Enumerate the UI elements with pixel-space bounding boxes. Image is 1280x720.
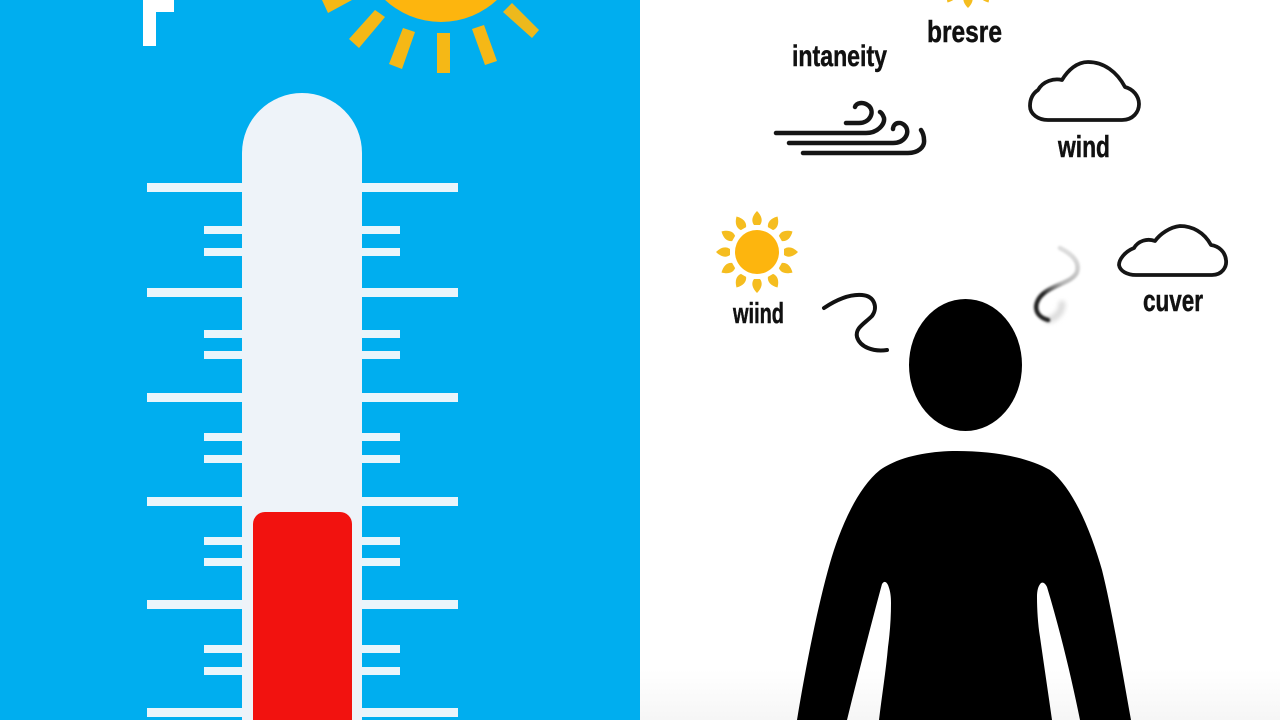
unit letter F <box>143 0 174 46</box>
icon: large sun <box>322 0 539 73</box>
label: wind (left): wiind <box>732 298 784 330</box>
thermometer tube <box>242 93 362 720</box>
label: intensity: intaneity <box>792 40 887 73</box>
label: breeze: bresre <box>927 14 1002 49</box>
icon: partial sun at top <box>927 0 1009 8</box>
person body <box>797 451 1131 720</box>
icon: smoke squiggle right <box>1036 248 1078 320</box>
icon: small sun <box>716 211 798 293</box>
person silhouette <box>797 299 1131 720</box>
icon: cloud right <box>1119 226 1226 275</box>
icon: cloud <box>1030 62 1139 120</box>
label: cover: cuver <box>1143 283 1203 318</box>
label: wind: wind <box>1057 129 1110 164</box>
panel: temperature (blue) <box>0 0 640 720</box>
thermometer red fill <box>253 512 352 720</box>
person head <box>909 299 1022 431</box>
icon: wind gusts <box>776 103 924 153</box>
icon: squiggle left <box>824 295 887 350</box>
panel: person and weather (white) <box>640 0 1280 720</box>
thermometer scale ticks <box>147 183 458 717</box>
